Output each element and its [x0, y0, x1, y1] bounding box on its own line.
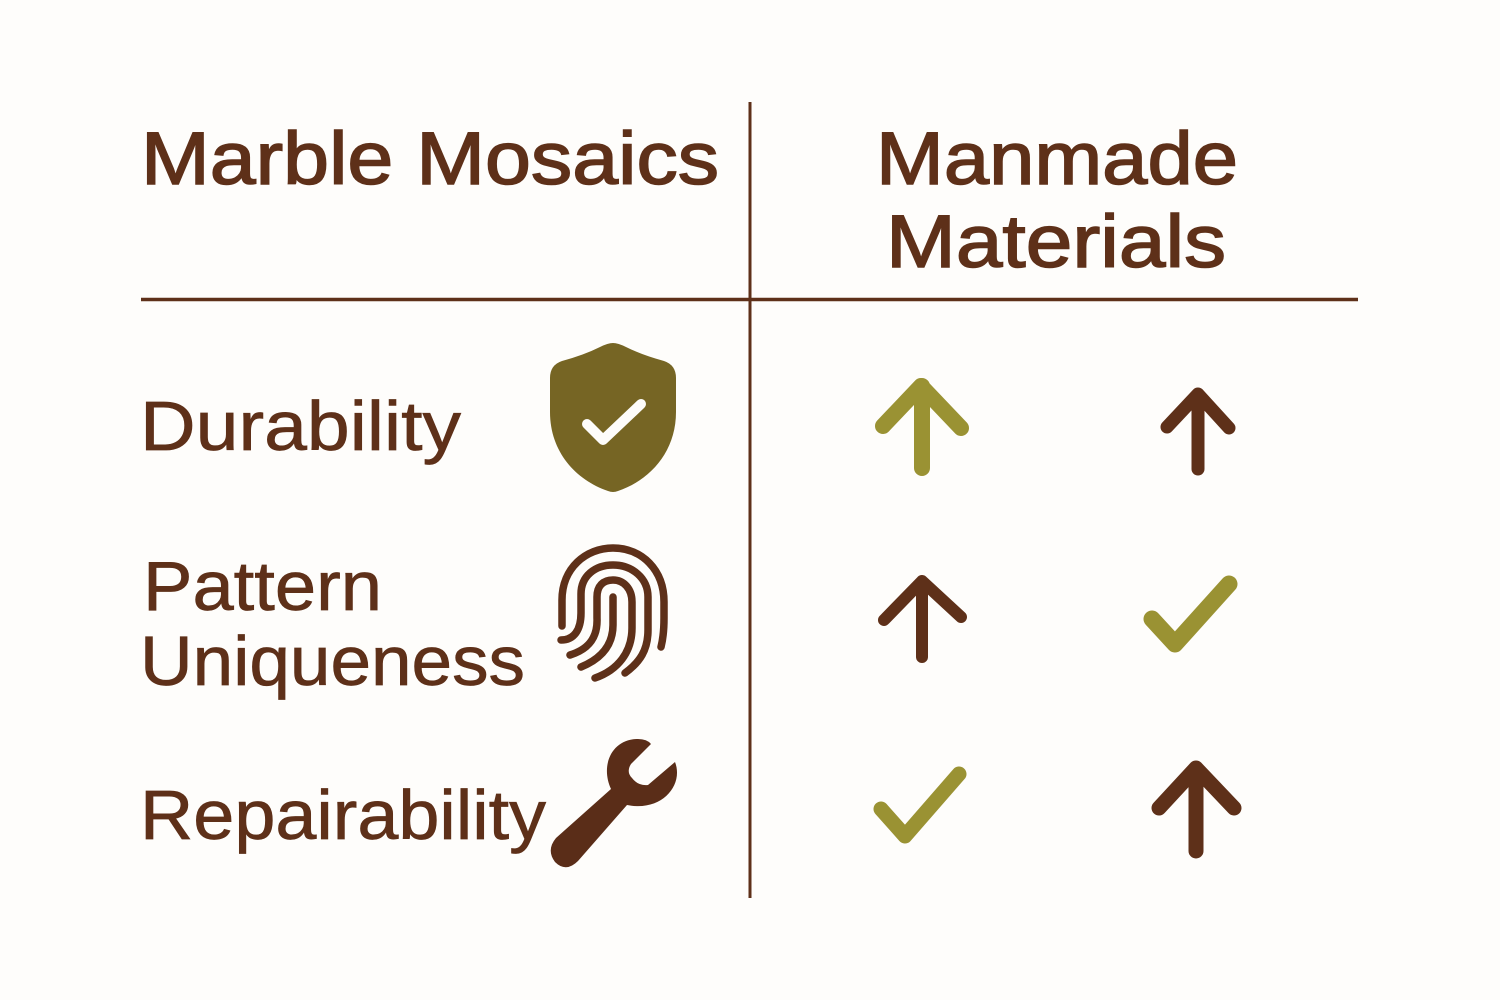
heading: Marble Mosaics: Marble Mosaics: [141, 117, 719, 200]
row 3: olive check: [881, 774, 959, 836]
row 2: brown arrow: [884, 581, 961, 657]
row 3: brown arrow: [1159, 768, 1234, 851]
heading: Manmade Materials: Materials: [886, 200, 1226, 283]
row 1: olive arrow: [883, 386, 961, 468]
icon: shield with check: [550, 343, 676, 492]
label: Repairability: Repairability: [140, 776, 546, 854]
row 1: brown arrow: [1167, 394, 1229, 469]
label: Pattern Uniqueness: [140, 547, 525, 700]
label: Pattern Uniqueness: Uniqueness: [140, 622, 525, 700]
row 2: olive check: [1152, 584, 1229, 644]
icon: fingerprint: [561, 548, 664, 678]
label: Pattern Uniqueness: Pattern: [143, 547, 382, 625]
label: Durability: Durability: [140, 387, 461, 465]
heading: Manmade Materials: Manmade: [876, 117, 1238, 200]
icon: wrench: [551, 739, 677, 867]
heading: Manmade Materials: [876, 117, 1238, 283]
